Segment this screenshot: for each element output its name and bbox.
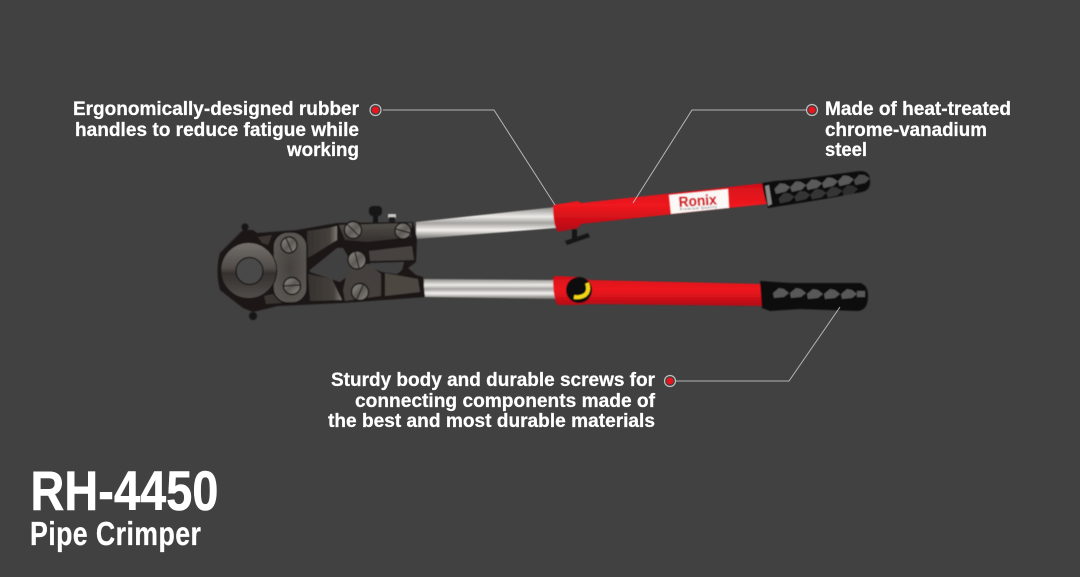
text: steel: chrome-vanadium [825,120,987,141]
lower handle red sleeve [553,276,764,306]
plate: lower wedge [264,294,282,304]
plate: upper wedge [258,235,272,245]
upper handle red sleeve [553,183,767,232]
callout line: rubber handles [383,110,555,205]
text: rubber handles [73,99,360,161]
opening gap [310,248,350,282]
pipe crimper tool [218,171,872,320]
marker: screws [664,376,676,386]
text: rubber handles: Ergonomically-designed rubber [73,99,360,120]
screw slots [284,224,410,299]
plate: lower link [343,263,381,301]
pivot link plate [273,232,307,303]
rear gap [370,262,404,274]
text: steel [825,99,1011,161]
plate: lower jaw [308,274,342,301]
plate: rear block [385,273,420,296]
die ring [221,242,277,298]
model number: RH-4450 [30,459,218,522]
marker: rubber handles [370,104,381,116]
upper grip ferrule [765,185,772,206]
Ronix label: Premium Quality [680,205,717,211]
text: steel: Made of heat-treated [825,99,1011,120]
lower handle grip [760,281,868,311]
text: screws: connecting components made of [355,391,656,412]
text: screws: the best and most durable materials [328,411,655,432]
head silhouette [218,222,425,312]
screws [281,222,411,300]
adjusting knob [565,229,590,245]
Ronix label [669,189,729,214]
text: screws: Sturdy body and durable screws for [331,370,656,391]
callout line: chrome-vanadium steel [633,110,806,203]
text: rubber handles: handles to reduce fatigue while [75,120,359,141]
callout line: durable screws [676,307,840,381]
grip texture upper [774,172,872,204]
plate: lower arm inner [369,246,414,261]
product name: Pipe Crimper [30,516,201,553]
upper handle silver tube [416,207,556,239]
yellow-marked pivot screw [566,277,592,303]
die hole [236,258,263,284]
text: steel: steel [825,140,867,161]
text: screws [328,370,656,432]
text: rubber handles: working [286,140,359,161]
crimper head [218,206,425,320]
plate: top bar [339,223,412,242]
lower handle silver tube [424,279,556,299]
top adjusting knob and nubs [242,206,396,320]
upper handle grip [762,171,870,208]
plate: upper arm [307,226,337,258]
marker: steel [806,104,818,116]
grip texture lower [773,288,865,299]
Ronix label: Ronix [678,192,717,211]
